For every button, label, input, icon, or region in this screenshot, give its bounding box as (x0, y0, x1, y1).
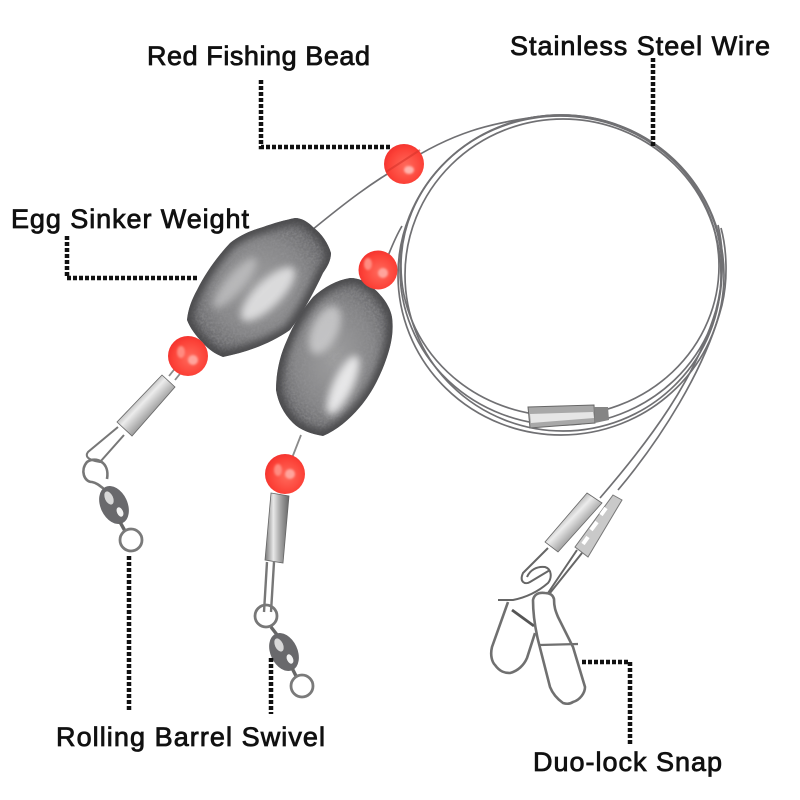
egg sinker weight 2 (276, 278, 393, 436)
leader: red fishing bead (261, 80, 392, 147)
left crimp and swivel (83, 375, 175, 551)
label: rolling barrel swivel: Rolling Barrel Swivel (56, 722, 325, 752)
leader: egg sinker weight (67, 236, 199, 278)
duo-lock snap assembly (491, 493, 622, 704)
red fishing bead middle (358, 250, 398, 290)
red fishing bead top (384, 144, 424, 184)
label: duo-lock snap: Duo-lock Snap (533, 747, 722, 777)
steel wire loop (312, 115, 726, 498)
leader: rolling barrel swivel right (269, 658, 273, 714)
leader: rolling barrel swivel left (127, 556, 131, 712)
snap left (491, 602, 535, 673)
crimp sleeve on wire loop (528, 405, 609, 428)
red fishing bead lower (265, 454, 305, 494)
leader: stainless steel wire (651, 58, 655, 146)
label: red fishing bead: Red Fishing Bead (147, 41, 370, 71)
wire between sinker and lower beads (169, 366, 301, 458)
egg sinker weight 1 (187, 218, 331, 357)
leader: duo-lock snap (582, 662, 630, 746)
red fishing bead left (168, 336, 208, 376)
lower crimp and swivel (255, 493, 313, 697)
snap right (533, 593, 585, 704)
label: stainless steel wire: Stainless Steel Wire (510, 31, 770, 61)
label: egg sinker weight: Egg Sinker Weight (11, 204, 249, 234)
